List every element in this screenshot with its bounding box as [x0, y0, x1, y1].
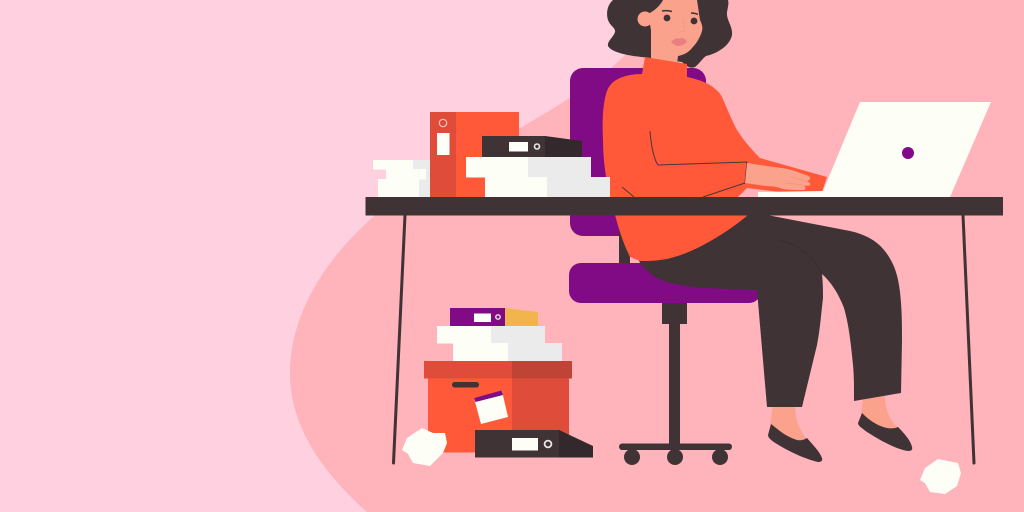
sticky note — [474, 390, 508, 424]
lips — [671, 38, 687, 46]
eyebrows — [662, 11, 698, 14]
nose — [678, 18, 684, 32]
black binder on desk — [482, 136, 582, 157]
finger lines — [785, 177, 806, 185]
background blob — [290, 0, 1024, 512]
paper stack on box — [437, 326, 562, 361]
laptop — [758, 102, 991, 197]
orange sweater — [603, 57, 827, 261]
purple binder on stack — [450, 308, 538, 326]
trousers — [630, 213, 902, 407]
desk top — [366, 197, 1003, 216]
eyes — [664, 15, 670, 21]
paper stack on desk — [466, 157, 610, 198]
office chair — [569, 68, 761, 465]
crumpled paper left — [402, 428, 447, 466]
black binder on floor — [475, 430, 593, 458]
hand — [745, 163, 810, 190]
left paper stack on desk — [373, 160, 431, 198]
feet and shoes — [768, 396, 912, 462]
face and neck — [638, 0, 702, 64]
desk legs — [394, 215, 974, 463]
storage box — [424, 361, 572, 452]
red binder upright — [430, 112, 519, 198]
crumpled paper right — [920, 459, 961, 494]
hair — [607, 0, 732, 68]
sleeve fold lines — [622, 131, 747, 197]
